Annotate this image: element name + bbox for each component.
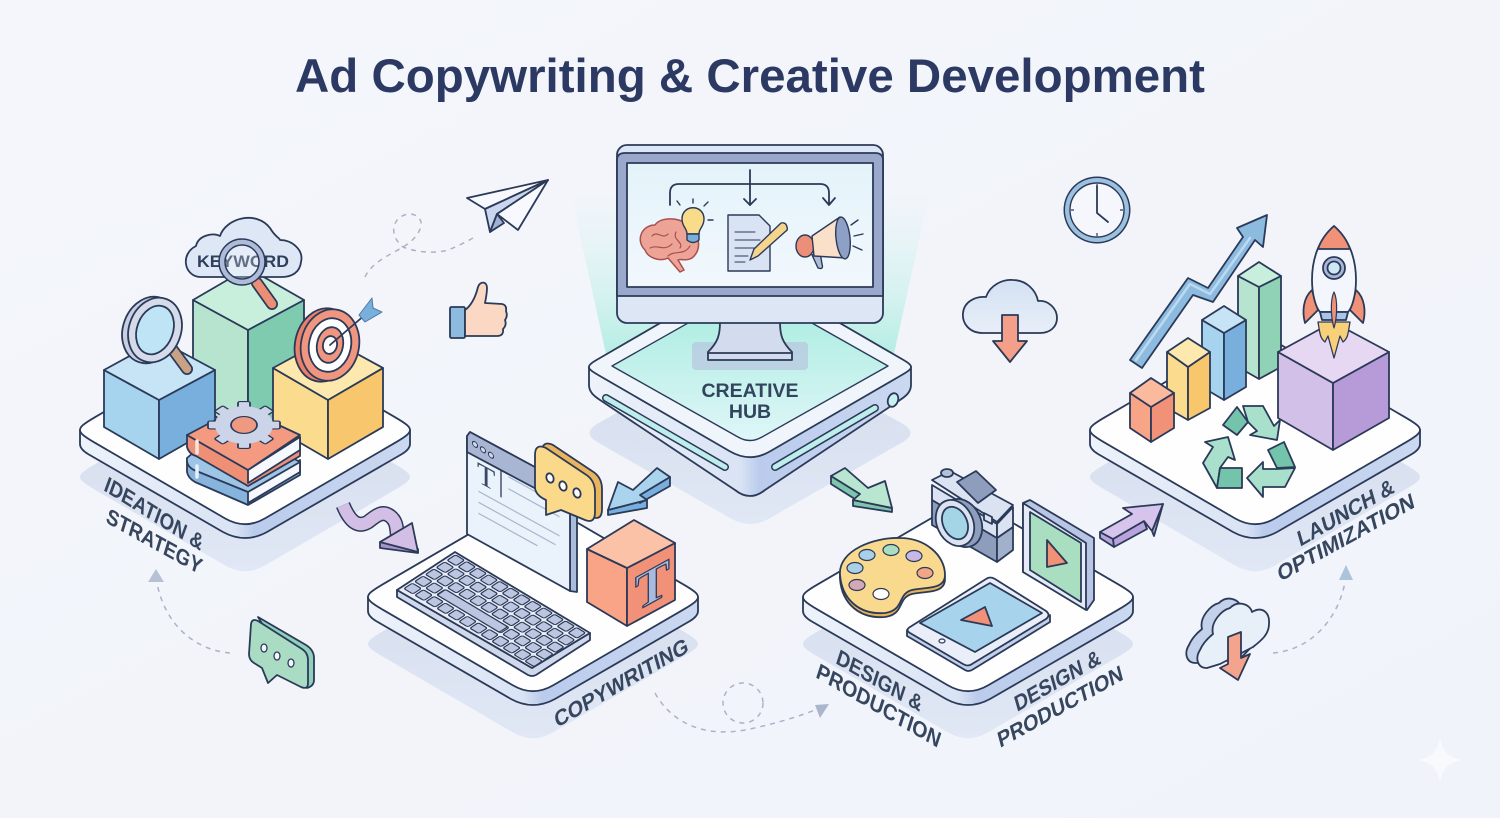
labels: left side: PRODUCTION <box>813 660 944 753</box>
platform <box>803 501 1133 738</box>
purple cube <box>1278 322 1389 450</box>
icon: document and pencil <box>728 215 787 271</box>
labels: right side: PRODUCTION <box>995 661 1126 753</box>
icon: palette <box>840 538 945 617</box>
shadow <box>590 342 910 524</box>
icon: video panel <box>1023 500 1094 610</box>
dashed connector: bottom left <box>148 569 230 653</box>
icon: keyword cloud: KEYWORD <box>197 252 289 271</box>
icon: book stack <box>187 407 300 505</box>
panel: launch and optimization <box>1090 215 1420 587</box>
icon: small magnifier <box>222 242 272 304</box>
icon: keyboard <box>397 552 590 676</box>
projection beam <box>570 190 930 372</box>
green cube <box>193 268 304 440</box>
icon: camera <box>929 469 1013 562</box>
label: launch and optimization: LAUNCH & <box>1295 473 1397 552</box>
bar chart <box>1130 262 1281 442</box>
dashed connector: launch <box>1273 565 1353 653</box>
label: creative hub: CREATIVE <box>702 380 798 402</box>
icon: target with arrow <box>288 298 382 387</box>
icon: clock <box>1064 176 1130 244</box>
dashed connector: copywriting to design <box>655 683 829 732</box>
yellow bar <box>1167 338 1210 420</box>
icon: light bulb <box>677 199 713 242</box>
panel: ideation and strategy <box>80 218 410 579</box>
icon: rocket <box>1303 226 1365 358</box>
icon: large magnifier <box>113 289 191 371</box>
labels: right side: DESIGN & <box>1012 644 1103 717</box>
label: launch and optimization: OPTIMIZATION <box>1275 488 1417 587</box>
icon: paper plane <box>467 180 548 232</box>
browser window <box>467 432 577 592</box>
icon: recycle <box>1203 406 1295 497</box>
dashed connector: paper plane loop <box>365 214 473 277</box>
icon: sparkle watermark <box>1418 738 1462 782</box>
growth arrow <box>1130 215 1267 368</box>
flow arrows on screen <box>670 170 835 205</box>
label: creative hub: HUB <box>729 401 771 423</box>
yellow cube <box>273 338 383 459</box>
icon: green speech bubble <box>249 617 314 688</box>
arrow: hub to design <box>831 468 892 512</box>
monitor <box>617 145 883 370</box>
panel: design and production <box>803 469 1133 753</box>
label: ideation and strategy: IDEATION & <box>101 473 207 556</box>
icon: letter T cube: T <box>635 547 670 624</box>
platform <box>368 501 698 738</box>
label: copywriting: COPYWRITING <box>552 633 691 733</box>
icon: yellow speech bubble <box>535 444 602 521</box>
icon: gear <box>208 402 280 448</box>
panel: creative hub <box>570 145 930 524</box>
orange bar <box>1130 378 1174 442</box>
label: creative hub <box>702 380 798 423</box>
icon: megaphone <box>796 216 863 268</box>
green bar <box>1238 262 1281 379</box>
panel: copywriting <box>368 432 698 738</box>
icon: cloud with download arrow <box>963 280 1057 362</box>
labels: left side: DESIGN & <box>833 646 925 717</box>
blue bar <box>1202 306 1246 400</box>
icon: thumbs up <box>450 283 507 338</box>
label: ideation and strategy: STRATEGY <box>104 505 205 579</box>
icon: keyword cloud <box>186 218 301 277</box>
icon: letter T cube <box>587 520 675 626</box>
arrow: ideation to copywriting <box>343 505 418 553</box>
arrow: design to launch <box>1100 504 1163 547</box>
icon: isometric cloud with download arrow <box>1186 599 1269 680</box>
icon: tablet <box>907 578 1050 671</box>
hub base <box>589 275 911 496</box>
text cursor glyph: T <box>477 454 496 498</box>
icon: brain <box>640 219 699 272</box>
platform <box>1090 334 1420 571</box>
title: Ad Copywriting & Creative Development <box>295 49 1205 102</box>
platform <box>80 334 410 571</box>
blue cube <box>104 340 215 459</box>
arrow: hub to copywriting <box>608 468 670 515</box>
